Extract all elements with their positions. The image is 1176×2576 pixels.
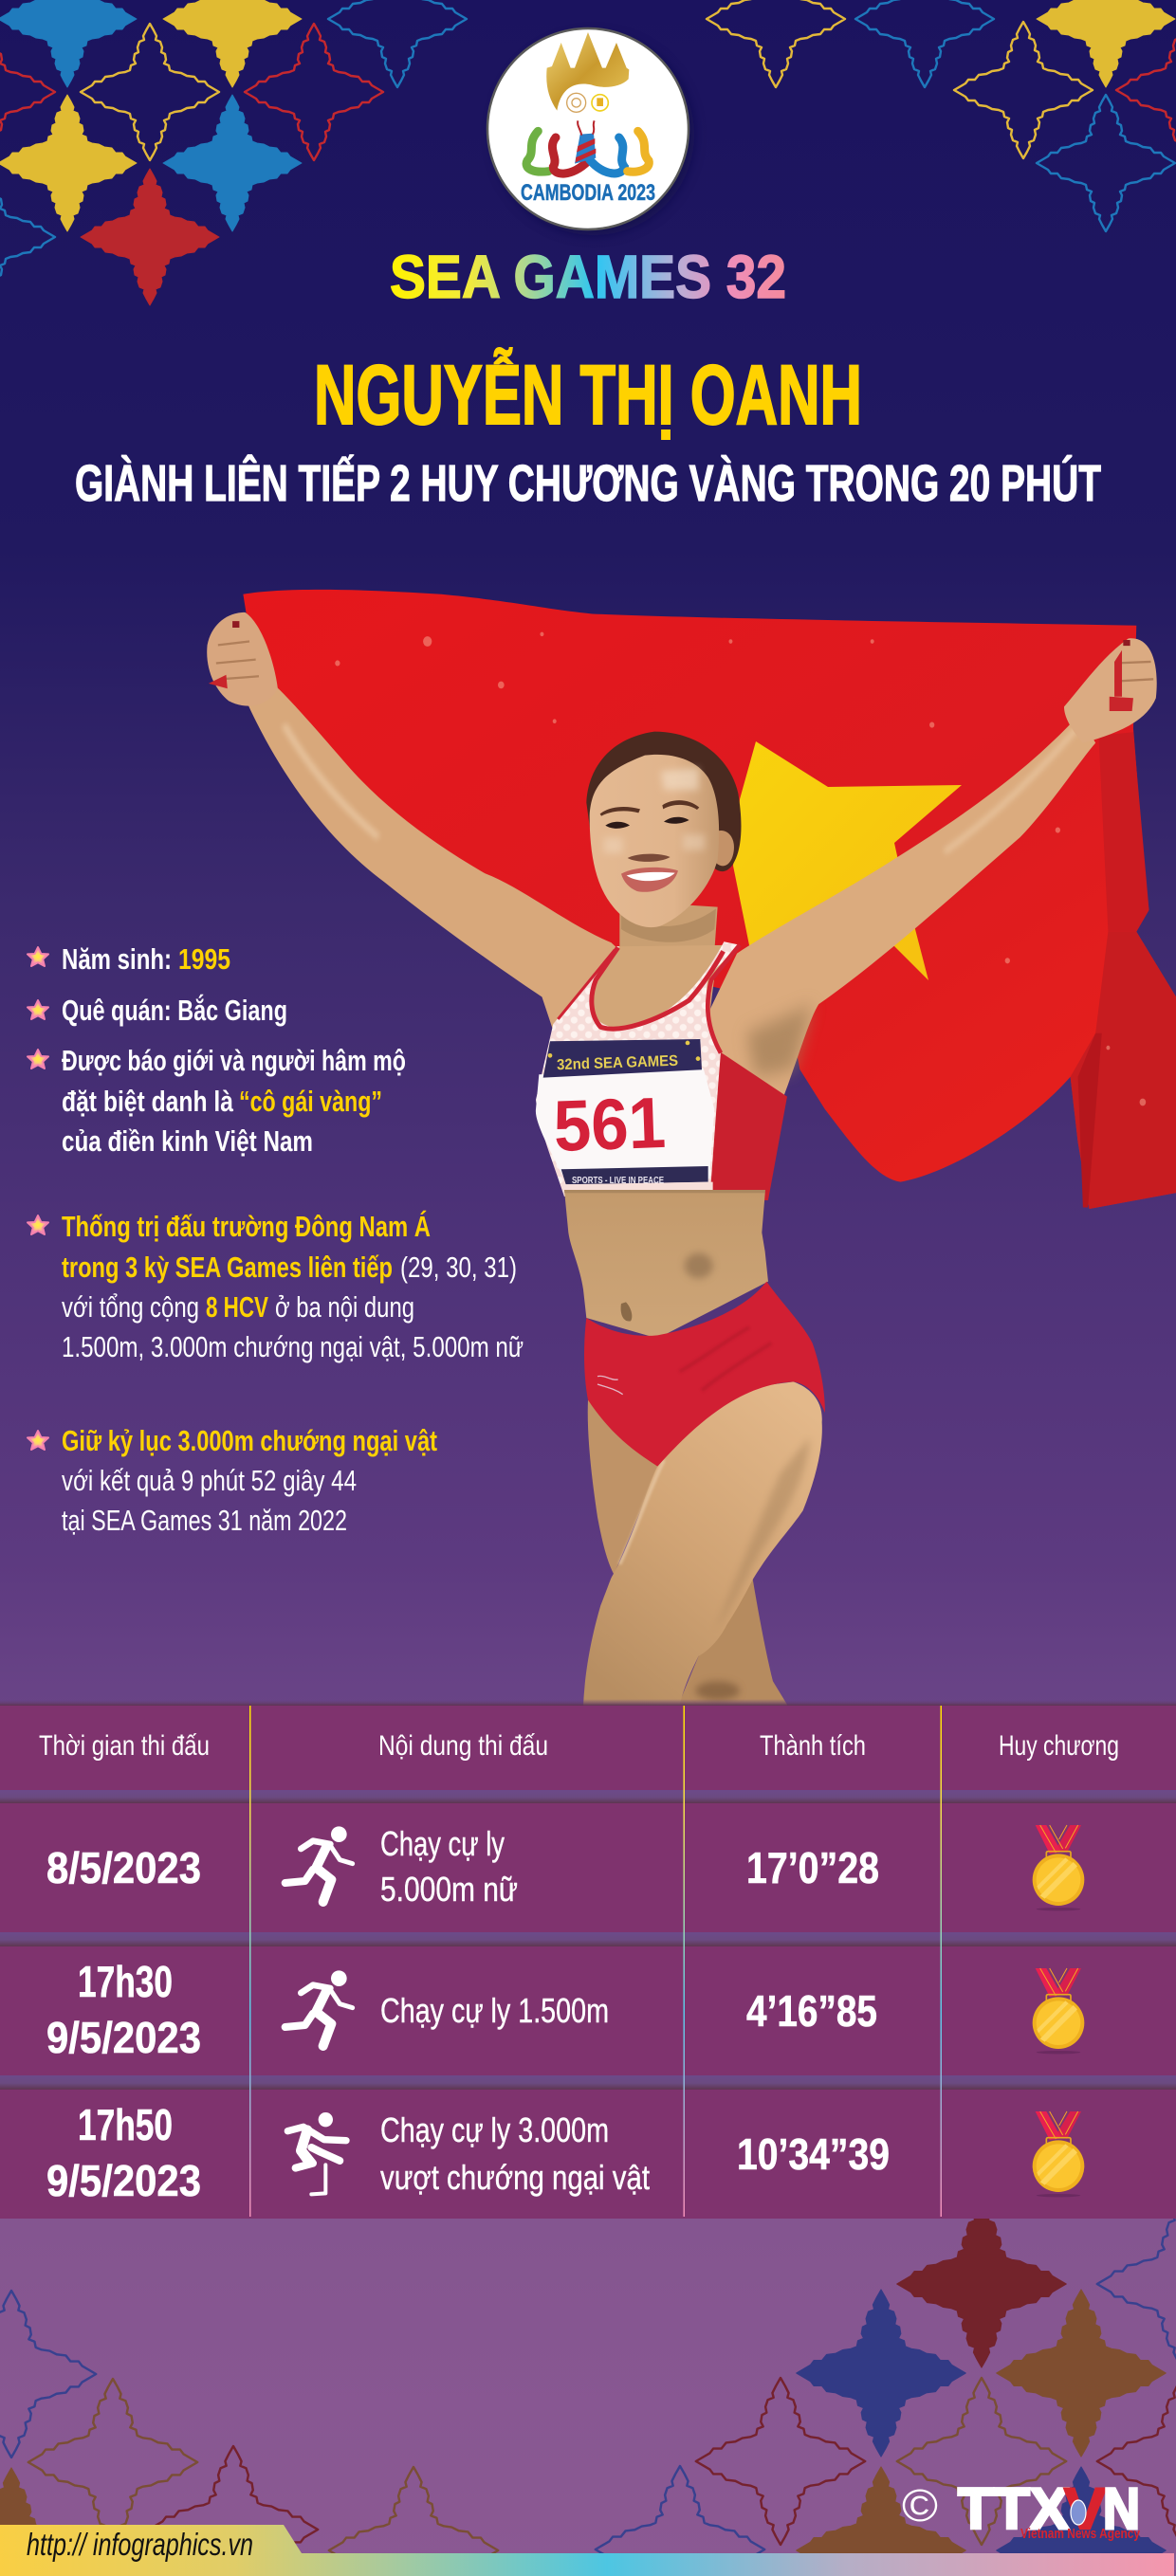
ornaments: top left pattern (0, 0, 467, 305)
icon: runner (285, 1826, 353, 1902)
text: nickname: của điền kinh Việt Nam (62, 1124, 313, 1158)
table header: Thành tích (760, 1730, 866, 1762)
icon: gold medal (1033, 2111, 1084, 2197)
row 1: 5000m: 5.000m nữ (380, 1870, 518, 1909)
icon: star bullet (28, 1050, 48, 1069)
back leg (588, 1400, 788, 1706)
text: nickname: Được báo giới và người hâm mộ (62, 1044, 406, 1077)
row 3: 3000m steeplechase: Chạy cự ly 3.000m (380, 2110, 609, 2149)
icon: star bullet (28, 1000, 48, 1019)
icon: star bullet (28, 1431, 48, 1450)
text: nickname: đặt biệt danh là (62, 1085, 234, 1118)
head (586, 732, 741, 927)
table header: Thời gian thi đấu (39, 1730, 210, 1762)
logo: TTXVN: V (1064, 2476, 1106, 2541)
text: dominance: ở ba nội dung (275, 1290, 414, 1324)
icon: star bullet (28, 947, 48, 966)
table header: Nội dung thi đấu (378, 1730, 548, 1762)
row 1: 5000m (46, 1824, 1084, 1910)
text: birth year: 1995 (178, 942, 230, 976)
arms and hands (207, 612, 1157, 1095)
row 3: 3000m steeplechase: 17h50 (78, 2100, 173, 2149)
logo: TTXVN: TTX (958, 2476, 1069, 2541)
bib text (552, 1053, 679, 1186)
logo: Cambodia 2023 emblem: CAMBODIA 2023 (521, 180, 655, 206)
text: dominance: Thống trị đấu trường Đông Nam Á (62, 1210, 431, 1243)
text: record (62, 1424, 437, 1537)
row 2: 1500m: 4’16”85 (746, 1986, 877, 2036)
text: nickname: “cô gái vàng” (239, 1085, 382, 1118)
row 1: 5000m: 17’0”28 (746, 1843, 879, 1892)
text: hometown: Quê quán: Bắc Giang (62, 993, 287, 1027)
text: dominance: 1.500m, 3.000m chướng ngại vật, 5.000m nữ (62, 1330, 524, 1363)
icon: star bullet (28, 1215, 48, 1234)
website url: http:// infographics.vn (27, 2527, 253, 2562)
bullet: record (28, 1424, 437, 1537)
icon: gold medal (1033, 1825, 1084, 1910)
text: record: với kết quả 9 phút 52 giây 44 (62, 1464, 357, 1497)
bib text: SPORTS - LIVE IN PEACE (572, 1176, 664, 1186)
flag (243, 590, 1176, 1209)
text: dominance: trong 3 kỳ SEA Games liên tiếp (62, 1251, 393, 1284)
table: competition results (0, 1699, 1176, 2219)
text: dominance (62, 1210, 524, 1363)
icon: hurdler (287, 2112, 346, 2194)
torso and singlet (536, 901, 787, 1200)
row 2: 1500m: 9/5/2023 (46, 2013, 201, 2062)
text: dominance: (29, 30, 31) (400, 1251, 517, 1284)
icon: runner (285, 1970, 353, 2046)
icon: gold medal (1033, 1968, 1084, 2054)
bullet list: personal info (28, 942, 406, 1158)
row 3: 3000m steeplechase: 9/5/2023 (46, 2156, 201, 2205)
row 2: 1500m: Chạy cự ly 1.500m (380, 1991, 609, 2030)
row 2: 1500m: 17h30 (78, 1957, 173, 2006)
table header: Huy chương (999, 1730, 1119, 1762)
photo: athlete holding the Vietnamese flag (207, 590, 1176, 1706)
text: dominance: với tổng cộng (62, 1290, 199, 1324)
text: record: Giữ kỷ lục 3.000m chướng ngại vật (62, 1424, 437, 1457)
logo: TTXVN (902, 2476, 1141, 2542)
bib text: 32nd SEA GAMES (557, 1053, 679, 1073)
text: birth year: Năm sinh: (62, 942, 172, 976)
footer: gradient bar and website tab (0, 2525, 1174, 2576)
ornaments: top right pattern (707, 0, 1176, 231)
title: athlete name: NGUYỄN THỊ OANH (314, 347, 862, 442)
heading: SEA Games 32: SEA GAMES 32 (390, 243, 786, 311)
ornaments: bottom pattern (0, 2201, 1176, 2576)
text: dominance: 8 HCV (206, 1290, 268, 1324)
logo: TTXVN: © (902, 2481, 938, 2531)
row 3: 3000m steeplechase (46, 2100, 1084, 2205)
logo: Cambodia 2023 emblem (487, 28, 694, 235)
flag star (733, 741, 962, 980)
bib text: 561 (552, 1083, 667, 1167)
table header (39, 1730, 1119, 1762)
row 1: 5000m: 8/5/2023 (46, 1843, 201, 1892)
logo: TTXVN: N (1103, 2476, 1140, 2541)
logo: TTXVN: Vietnam News Agency (1020, 2526, 1141, 2542)
row 1: 5000m: Chạy cự ly (380, 1824, 505, 1863)
row 2: 1500m (46, 1957, 1084, 2062)
text: record: tại SEA Games 31 năm 2022 (62, 1504, 347, 1537)
text: nickname (62, 1044, 406, 1158)
row 3: 3000m steeplechase: vượt chướng ngại vật (380, 2158, 650, 2197)
row 3: 3000m steeplechase: 10’34”39 (737, 2129, 890, 2179)
abdomen, shorts and front thigh (564, 1190, 825, 1706)
bullet: dominance at SEA Games (28, 1210, 524, 1363)
